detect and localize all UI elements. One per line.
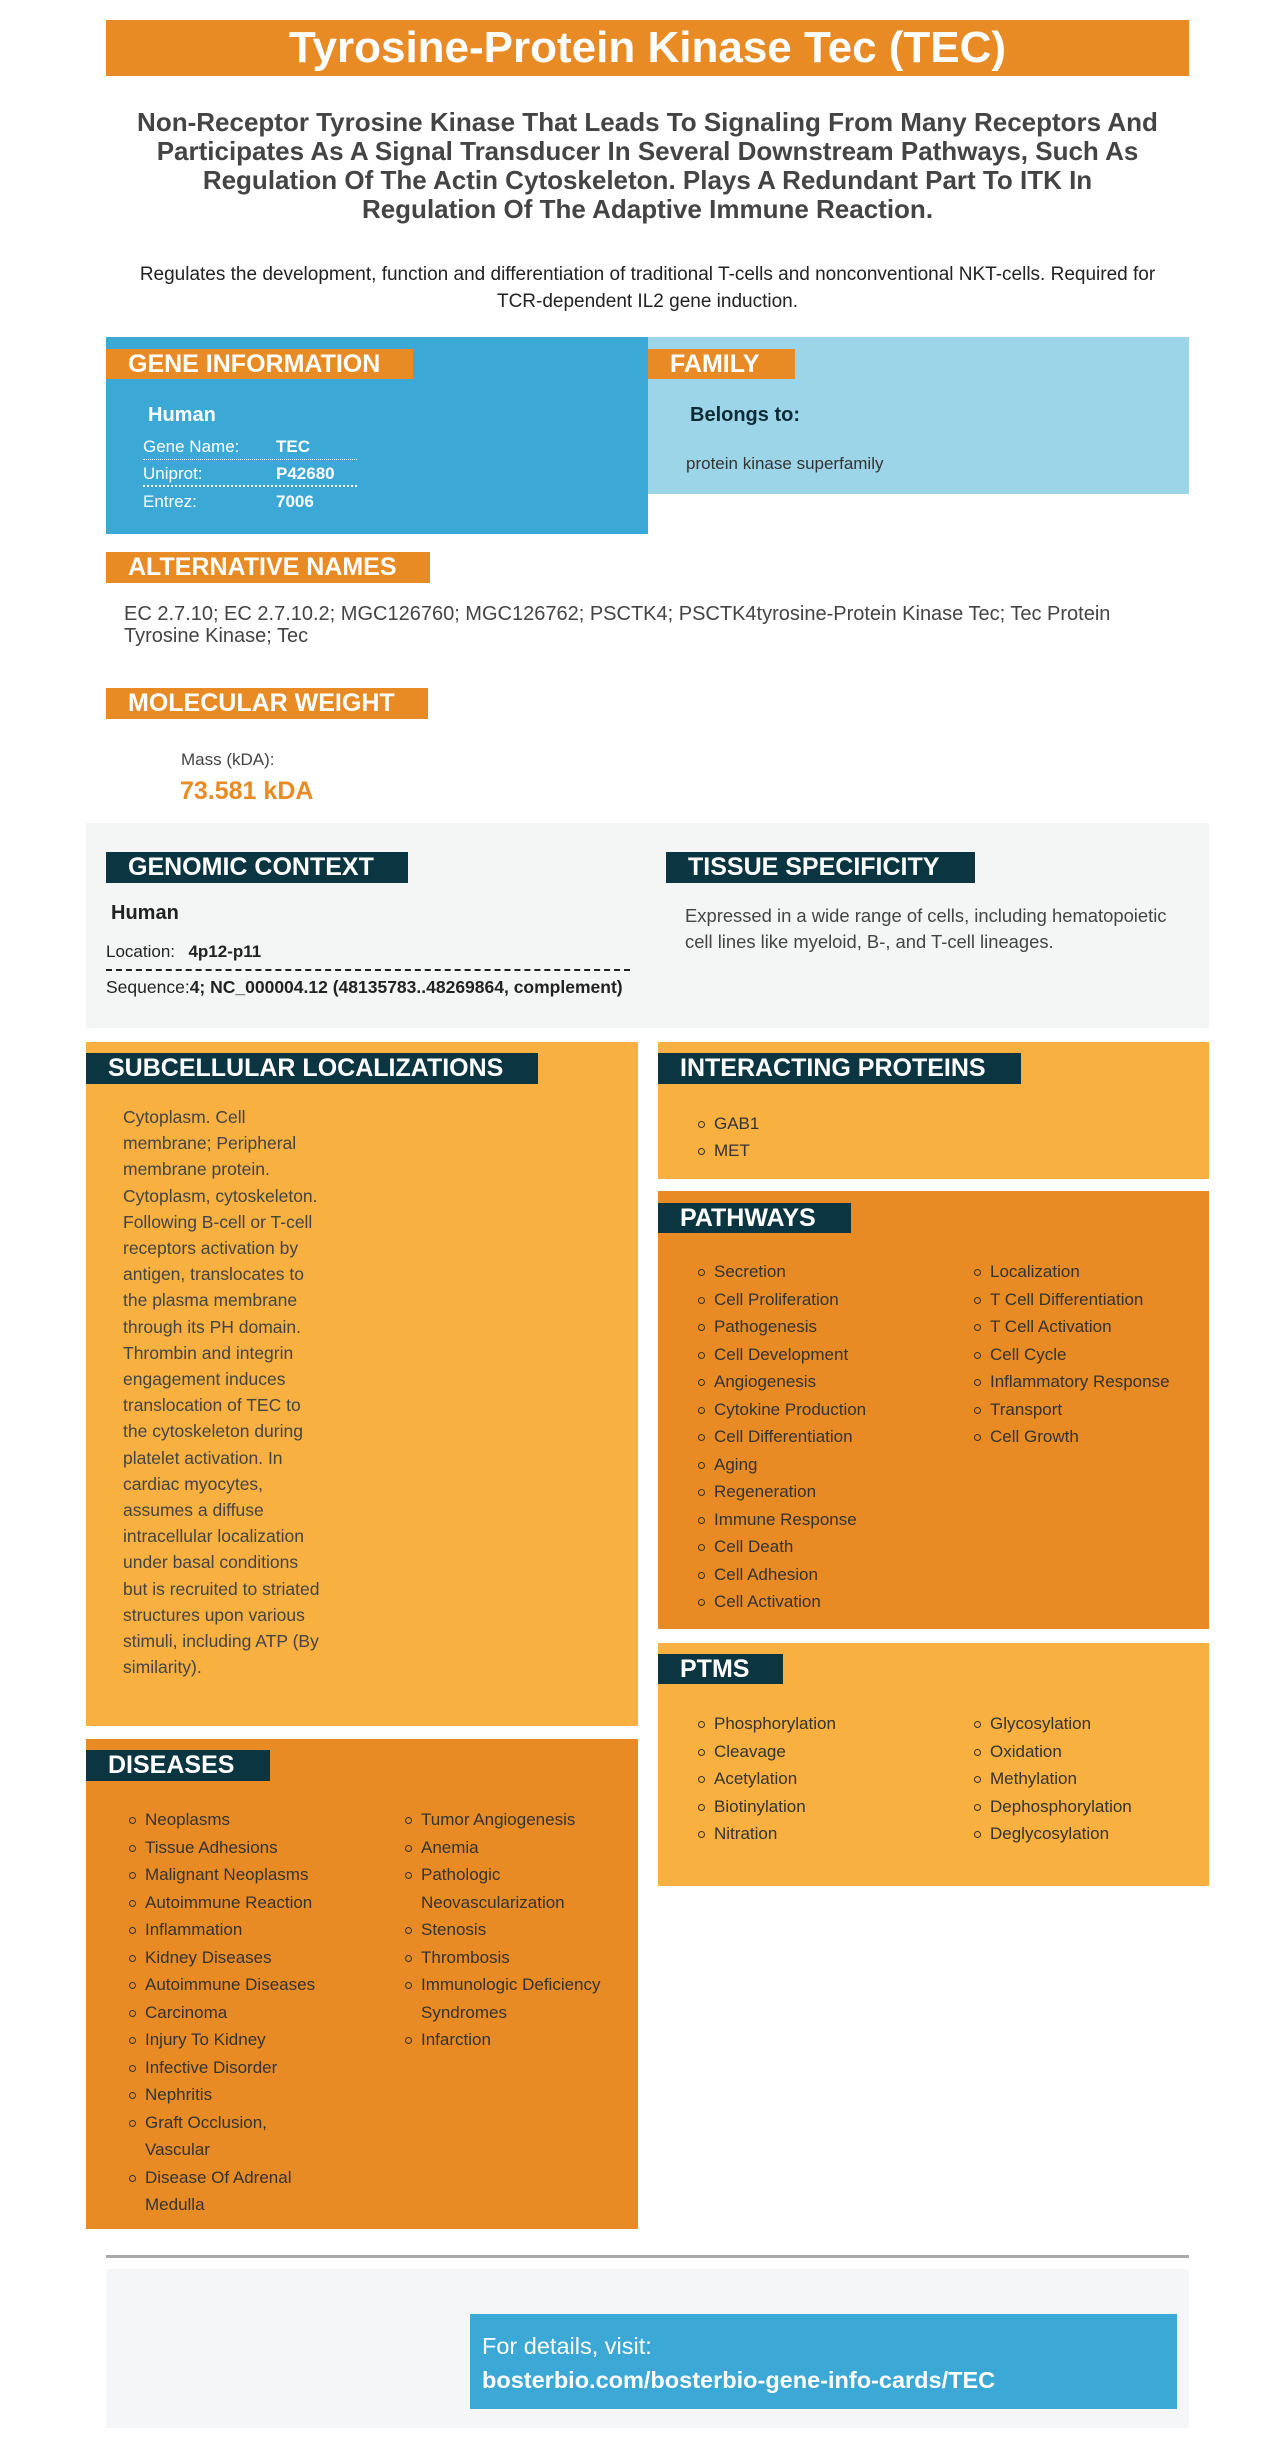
pathways col 2: T Cell Activation [990,1317,1112,1336]
tissue text [685,905,1166,952]
pathways col 1: Aging [714,1454,757,1474]
subcellular text: but is recruited to striated [123,1579,319,1599]
pathways col 1: Pathogenesis [714,1317,817,1336]
description: Regulates the development, function and differentiation of traditional T-cells and nonconventional NKT-cells. Required for [140,264,1155,285]
pathways col 1: Immune Response [714,1510,857,1528]
diseases col 1: Autoimmune Diseases [145,1975,315,1994]
subcellular text: platelet activation. In [123,1448,283,1468]
heading: diseases [86,1750,270,1781]
subtitle [137,107,1158,224]
diseases col 1: Kidney Diseases [145,1948,272,1966]
subcellular text: intracellular localization [123,1526,304,1546]
panel: gene information [106,337,648,534]
diseases col 1: Malignant Neoplasms [145,1865,308,1884]
genomic species: Human [111,902,179,924]
subcellular text: Cytoplasm, cytoskeleton. [123,1186,318,1206]
tissue text: Expressed in a wide range of cells, including hematopoietic [685,905,1166,926]
subcellular text: receptors activation by [123,1238,298,1258]
ptms col 2: Methylation [990,1769,1077,1788]
description [140,264,1155,312]
diseases col 2 [405,1810,601,2049]
family text: protein kinase superfamily [686,454,883,473]
alternative names text: Tyrosine Kinase; Tec [124,625,308,647]
panel: diseases [86,1739,638,2229]
ptms col 1: Cleavage [714,1742,786,1760]
heading: interacting: INTERACTING PROTEINS [680,1054,986,1082]
pathways col 2: Cell Growth [990,1427,1079,1446]
panel: ptms [658,1643,1209,1886]
panel: family [648,337,1189,494]
gene fields: TEC [276,437,310,456]
diseases col 2: Thrombosis [421,1948,510,1966]
diseases col 1 [129,1810,315,2214]
heading: gene information: GENE INFORMATION [128,350,380,378]
heading: molecular weight: MOLECULAR WEIGHT [128,689,395,717]
pathways col 2: Localization [990,1262,1080,1281]
heading: genomic context: GENOMIC CONTEXT [128,853,374,881]
callout: details link [470,2314,1177,2409]
diseases col 1: Autoimmune Reaction [145,1892,312,1912]
pathways col 1: Cell Death [714,1537,793,1556]
subtitle: Regulation Of The Actin Cytoskeleton. Plays A Redundant Part To ITK In [203,165,1092,195]
pathways col 1: Regeneration [714,1482,816,1501]
subcellular text: translocation of TEC to [123,1395,301,1415]
diseases col 1: Disease Of Adrenal [145,2168,291,2186]
heading: pathways [658,1203,851,1233]
interacting list: MET [714,1141,750,1160]
panel: pathways [658,1191,1209,1629]
subcellular text: Cytoplasm. Cell [123,1107,246,1127]
pathways col 2: Inflammatory Response [990,1372,1170,1391]
subcellular text: stimuli, including ATP (By [123,1631,319,1651]
gene fields: 7006 [276,492,314,511]
diseases col 1: Neoplasms [145,1810,230,1829]
subcellular text: cardiac myocytes, [123,1474,263,1494]
callout: details link: For details, visit: [482,2333,652,2359]
diseases col 1: Injury To Kidney [145,2030,266,2049]
pathways col 1: Cell Proliferation [714,1290,839,1308]
subcellular text: membrane; Peripheral [123,1133,296,1153]
callout: details link: bosterbio.com/bosterbio-gene-info-cards/TEC [482,2367,995,2393]
heading: family [648,349,795,379]
heading: ptms [658,1654,783,1684]
ptms col 2: Oxidation [990,1742,1062,1760]
diseases col 2: Neovascularization [421,1892,565,1912]
subcellular text: antigen, translocates to [123,1264,304,1284]
ptms col 2: Glycosylation [990,1714,1091,1733]
gene fields [143,437,357,511]
subcellular text: structures upon various [123,1605,305,1625]
sequence: Sequence:4; NC_000004.12 (48135783..48269864, complement) [106,977,623,997]
diseases col 1: Vascular [145,2140,210,2159]
pathways col 2: T Cell Differentiation [990,1290,1143,1308]
diseases col 2: Pathologic [421,1865,500,1884]
tissue text: cell lines like myeloid, B-, and T-cell lineages. [685,931,1054,952]
panel: genomic context & tissue [86,823,1209,1028]
heading: pathways: PATHWAYS [680,1204,816,1232]
pathways col 2: Transport [990,1400,1062,1418]
heading: diseases: DISEASES [108,1751,234,1779]
diseases col 1: Tissue Adhesions [145,1838,278,1856]
pathways col 2: Cell Cycle [990,1344,1067,1364]
subtitle: Participates As A Signal Transducer In Several Downstream Pathways, Such As [157,136,1138,166]
diseases col 1: Nephritis [145,2085,212,2104]
title: Tyrosine-Protein Kinase Tec (TEC) [289,23,1006,72]
alternative names text: EC 2.7.10; EC 2.7.10.2; MGC126760; MGC126762; PSCTK4; PSCTK4tyrosine-Protein Kinase Tec; Tec Protein [124,603,1110,625]
diseases col 2: Tumor Angiogenesis [421,1810,575,1829]
mass value: 73.581 kDA [180,777,313,805]
title [106,20,1189,76]
ptms col 2: Deglycosylation [990,1824,1109,1843]
diseases col 1: Infective Disorder [145,2058,277,2076]
panel: subcellular localizations [86,1042,638,1726]
diseases col 2: Infarction [421,2030,491,2049]
interacting list: GAB1 [714,1114,759,1133]
subcellular text: assumes a diffuse [123,1500,264,1520]
ptms col 1: Biotinylation [714,1796,806,1816]
subcellular text: through its PH domain. [123,1317,301,1337]
subcellular text: similarity). [123,1657,202,1677]
diseases col 1: Inflammation [145,1920,242,1939]
pathways col 1 [698,1262,866,1611]
ptms col 1: Nitration [714,1824,777,1843]
subcellular text [123,1107,319,1677]
subtitle: Non-Receptor Tyrosine Kinase That Leads To Signaling From Many Receptors And [137,107,1158,137]
diseases col 1: Medulla [145,2195,205,2214]
ptms col 1: Acetylation [714,1769,797,1788]
heading: tissue specificity: TISSUE SPECIFICITY [688,853,939,881]
subcellular text: the cytoskeleton during [123,1421,303,1441]
ptms col 2: Dephosphorylation [990,1796,1132,1816]
alternative names text [124,603,1110,647]
panel: interacting proteins [658,1042,1209,1179]
ptms col 1: Phosphorylation [714,1714,836,1733]
pathways col 1: Cell Development [714,1344,848,1364]
heading: ptms: PTMS [680,1655,749,1683]
subcellular text: Thrombin and integrin [123,1343,293,1363]
footer panel [106,2269,1189,2428]
pathways col 1: Cell Differentiation [714,1427,853,1446]
species: Human [148,404,216,426]
dashed divider [106,969,630,971]
diseases col 1: Carcinoma [145,2002,227,2022]
pathways col 1: Cell Activation [714,1592,821,1611]
gene fields: Entrez: [143,492,197,511]
description: TCR-dependent IL2 gene induction. [497,291,798,312]
location: Location: 4p12-p11 [106,942,261,961]
diseases col 2: Immunologic Deficiency [421,1975,601,1994]
heading: family: FAMILY [670,350,759,378]
pathways col 1: Cytokine Production [714,1400,866,1418]
ptms col 1 [698,1714,836,1843]
gene fields: Gene Name: [143,437,239,456]
heading: alternative names: ALTERNATIVE NAMES [128,553,397,581]
subcellular text: engagement induces [123,1369,285,1389]
interacting list [698,1114,759,1160]
subcellular text: under basal conditions [123,1552,298,1572]
gene fields: P42680 [276,464,335,483]
diseases col 2: Anemia [421,1838,479,1856]
diseases col 2: Stenosis [421,1920,486,1939]
gene fields: Uniprot: [143,464,203,483]
pathways col 1: Secretion [714,1262,786,1281]
subcellular text: Following B-cell or T-cell [123,1212,312,1232]
diseases col 1: Graft Occlusion, [145,2112,267,2132]
pathways col 2 [974,1262,1170,1446]
subcellular text: the plasma membrane [123,1290,297,1310]
diseases col 2: Syndromes [421,2002,507,2022]
subcellular text: membrane protein. [123,1159,270,1179]
ptms col 2 [974,1714,1132,1843]
pathways col 1: Angiogenesis [714,1372,816,1391]
subtitle: Regulation Of The Adaptive Immune Reaction. [362,194,933,224]
mass label: Mass (kDA): [181,750,274,769]
pathways col 1: Cell Adhesion [714,1564,818,1584]
belongs to: Belongs to: [690,404,800,426]
heading: subcellular: SUBCELLULAR LOCALIZATIONS [108,1054,503,1082]
